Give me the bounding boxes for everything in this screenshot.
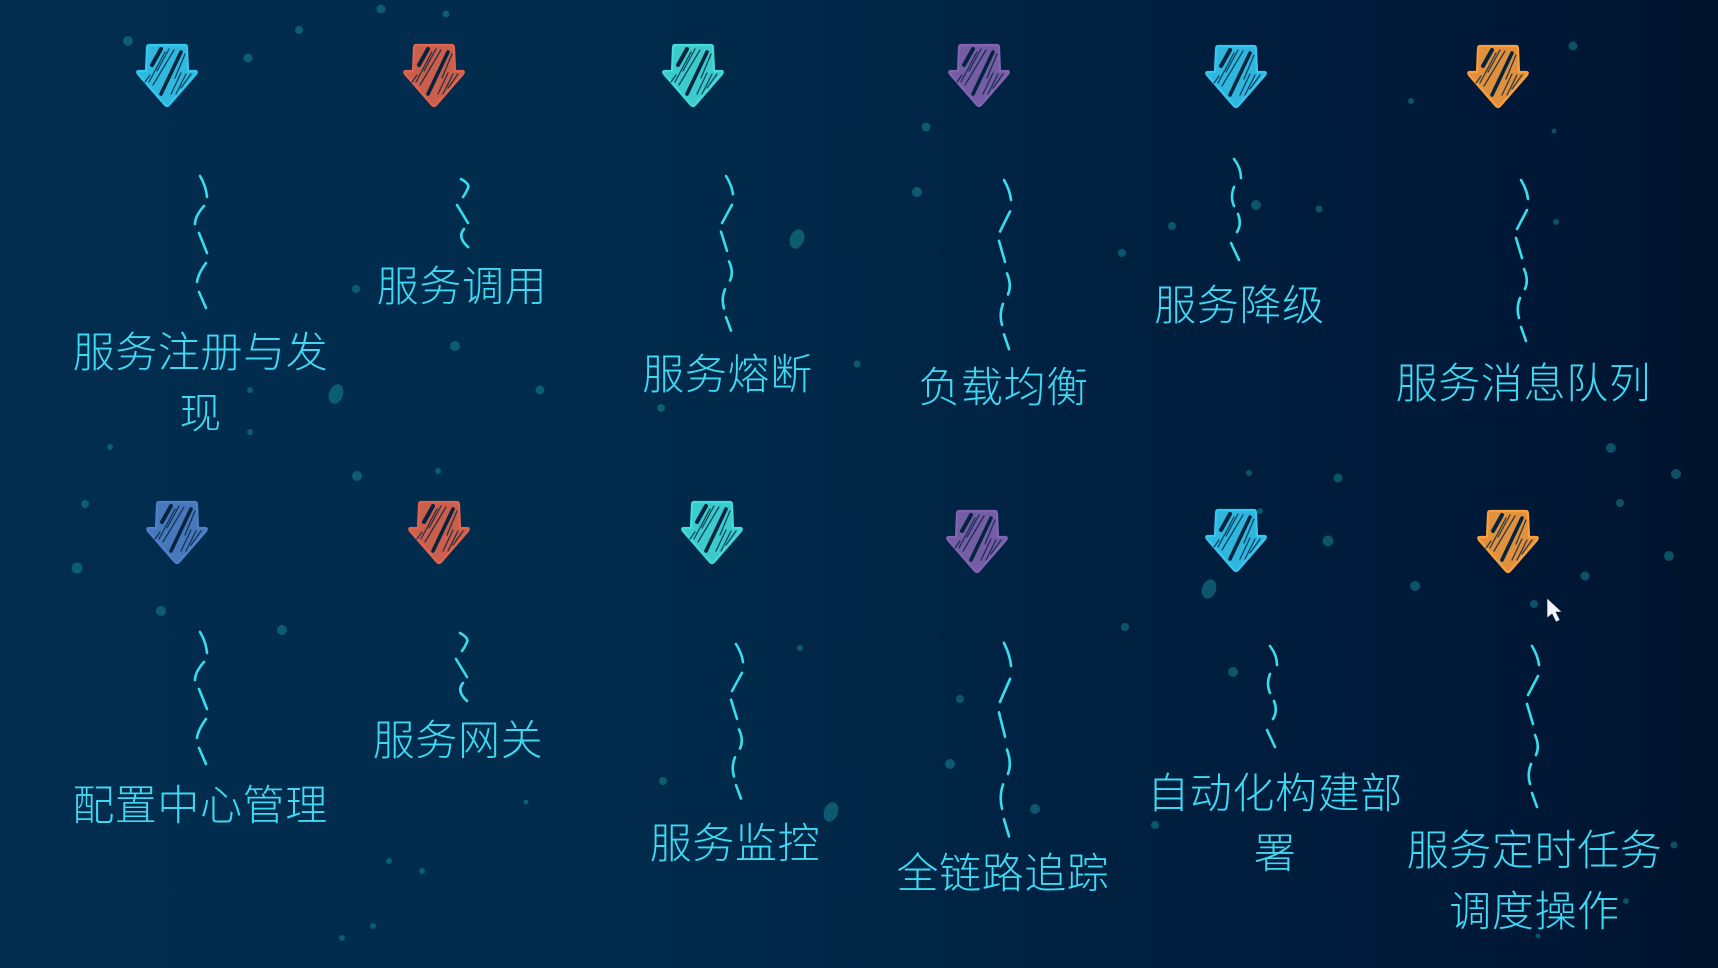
- item: 服务调用: [377, 45, 547, 310]
- squiggle connector: [195, 176, 207, 308]
- item: 服务网关: [373, 502, 543, 764]
- squiggle connector: [999, 643, 1011, 836]
- label: 服务消息队列: [1396, 360, 1651, 407]
- item: 服务注册与发现: [73, 45, 328, 437]
- icon: purple arrow: [949, 45, 1009, 106]
- squiggle connector: [1267, 646, 1277, 747]
- item: 自动化构建部署: [1147, 510, 1403, 877]
- item: 配置中心管理: [72, 502, 328, 829]
- squiggle connector: [999, 180, 1011, 349]
- icon: orange arrow: [1468, 46, 1528, 107]
- squiggle connector: [1527, 646, 1539, 807]
- item: 全链路追踪: [896, 511, 1110, 897]
- item: 服务监控: [650, 502, 820, 867]
- label: 负载均衡: [918, 364, 1089, 411]
- label: 自动化构建部: [1147, 770, 1403, 817]
- icon: blue arrow: [1206, 510, 1266, 571]
- item: 服务消息队列: [1396, 46, 1651, 407]
- label: 配置中心管理: [72, 782, 328, 829]
- icon: purple arrow: [947, 511, 1007, 572]
- squiggle connector: [1516, 180, 1528, 341]
- label: 服务定时任务: [1407, 827, 1662, 874]
- label: 服务降级: [1154, 282, 1325, 329]
- squiggle connector: [731, 644, 743, 799]
- squiggle connector: [456, 633, 467, 701]
- icon: teal arrow: [663, 45, 723, 106]
- label: 全链路追踪: [896, 850, 1110, 897]
- label: 调度操作: [1449, 888, 1620, 935]
- squiggle connector: [1231, 159, 1241, 260]
- squiggle connector: [457, 179, 468, 247]
- icon: mouse cursor: [1547, 598, 1562, 622]
- icon: blue arrow: [1206, 46, 1266, 107]
- item: 服务定时任务调度操作: [1407, 511, 1662, 935]
- icon: blue arrow: [137, 45, 197, 106]
- squiggle connector: [195, 632, 207, 764]
- label: 服务注册与发: [73, 329, 328, 376]
- label: 服务监控: [650, 820, 820, 867]
- label: 服务网关: [373, 717, 543, 764]
- item: 服务降级: [1154, 46, 1325, 329]
- item: 负载均衡: [918, 45, 1089, 411]
- label: 服务调用: [377, 263, 547, 310]
- label: 署: [1254, 830, 1296, 877]
- icon: orange arrow: [1478, 511, 1538, 572]
- item: 服务熔断: [642, 45, 813, 398]
- icon: red arrow: [404, 45, 464, 106]
- icon: steel blue arrow: [147, 502, 207, 563]
- icon: red arrow: [409, 502, 469, 563]
- label: 服务熔断: [642, 351, 813, 398]
- squiggle connector: [721, 176, 733, 331]
- label: 现: [179, 390, 222, 437]
- icon: teal arrow: [682, 502, 742, 563]
